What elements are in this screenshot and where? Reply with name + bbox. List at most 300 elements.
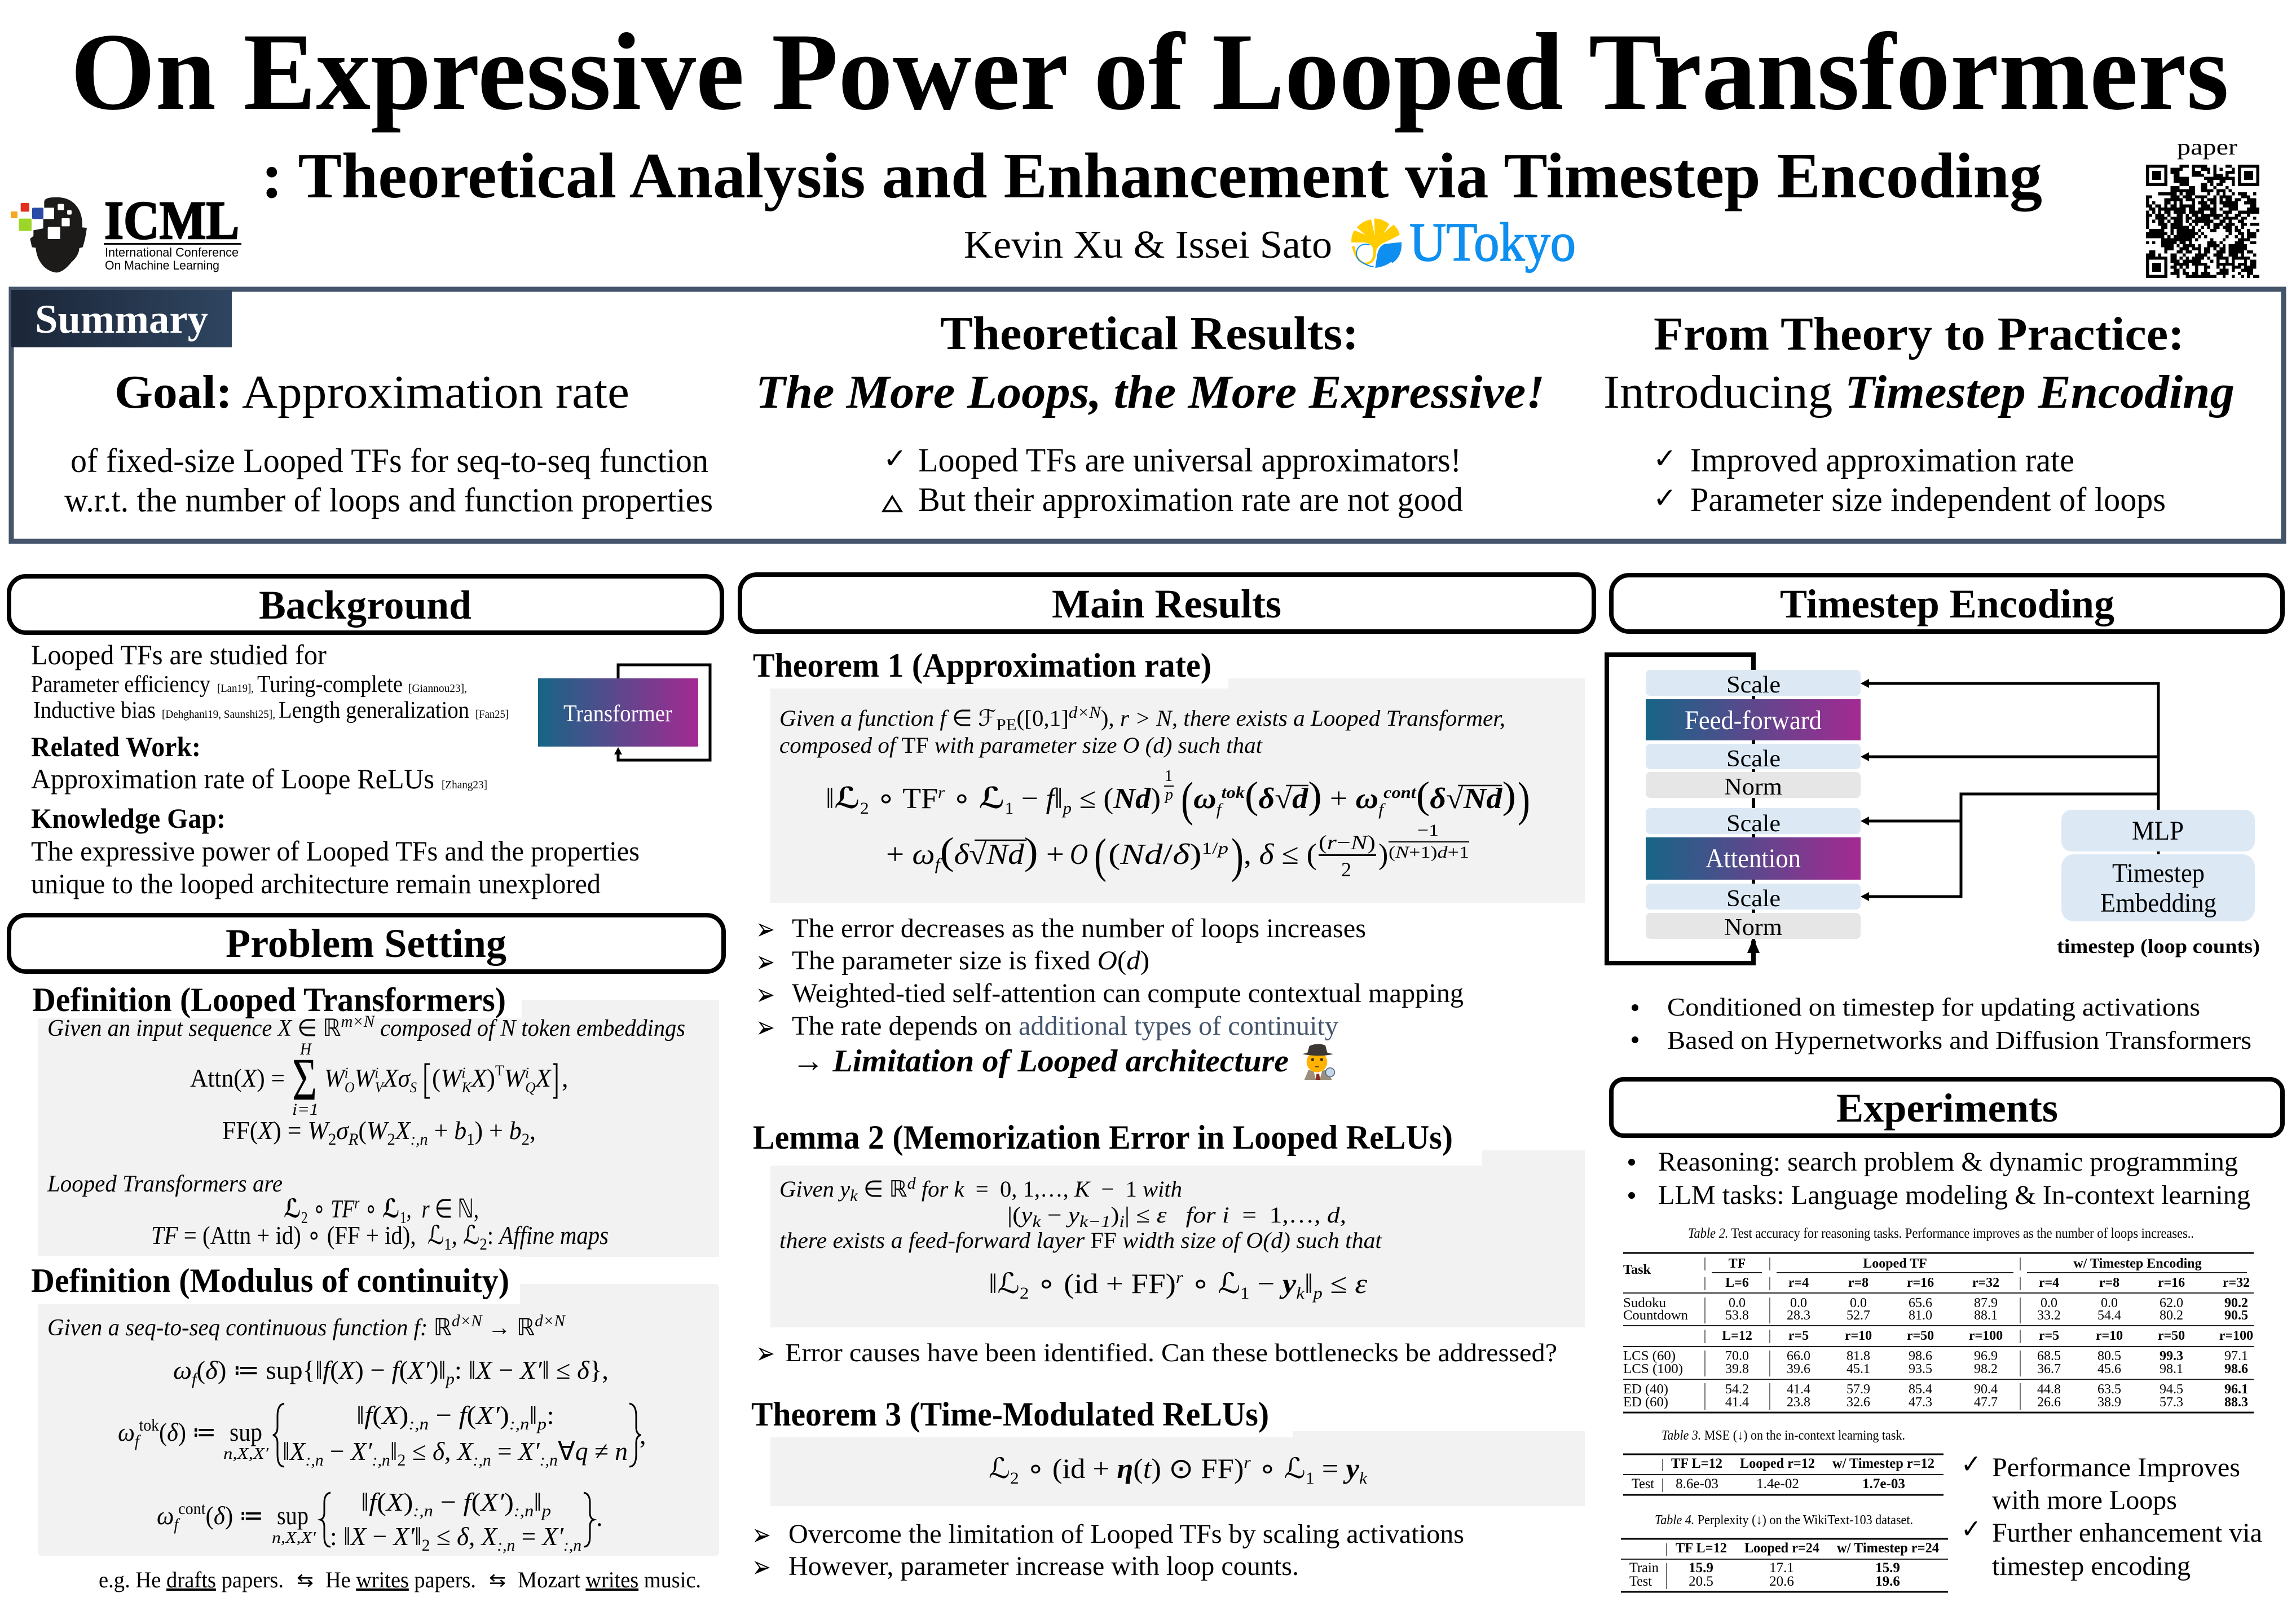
text: seq-to-seq function: d×N [535,1312,566,1330]
block: scale [1646,670,1861,698]
formula: token modulus: − [324,1437,351,1466]
summary: theoretical results [756,307,1545,518]
list: theorem 3 bullets: ➢ [752,1517,771,1552]
table 2: 98.6 [1909,1349,1932,1363]
heading: Experiments: Experiments [1836,1085,2058,1131]
text: lemma statement: k [850,1186,858,1205]
text block: background: Knowledge Gap: [31,802,226,834]
text: lemma statement: = 0, 1,…, K − 1 with [976,1176,1182,1202]
formula: lemma 2: y [1279,1268,1297,1299]
subtitle: : Theoretical Analysis and Enhancement via Timestep Encoding [261,140,2042,211]
text: lemma bullet: Error causes have been identified. Can these bottlenecks be addressed? [785,1338,1557,1367]
text block: background: [Giannou23], [408,682,467,695]
table 2: 53.8 [1725,1308,1749,1323]
formula: token modulus: ω [118,1418,135,1446]
table 2: 45.6 [2097,1362,2121,1376]
table 3: TF L=12 [1671,1456,1722,1471]
list: theorem 1 bullets: The error decreases as the number of loops increases [792,914,1366,943]
formula: modulus: ( [197,1356,205,1384]
formula: theorem 1 line 2: f [935,855,942,873]
table 2: TF [1729,1256,1746,1271]
table 4: w/ Timestep r=24 [1837,1541,1939,1556]
table 4: 20.5 [1689,1574,1713,1589]
formula: theorem 1 line 1: 1 [1165,767,1173,785]
callout: experiment takeaways: Further enhancement via [1992,1518,2262,1548]
formula: looped composition: r ∈ ℕ, [422,1194,492,1223]
formula: attention: Q [525,1079,536,1096]
summary: from theory to practice: ✓ [1653,482,1677,514]
table 2: ED (60) [1623,1395,1668,1410]
block: scale [1646,884,1861,912]
formula: theorem 1 line 1: δ√Nd) [1430,774,1515,817]
list: theorem 1 bullets: ➢ [756,977,775,1012]
formula: continuity modulus: cont [178,1499,206,1518]
table 2: r=16 [2158,1276,2185,1290]
table 3: Looped r=12 [1740,1456,1815,1471]
formula: theorem 1 line 1: p [1164,786,1173,804]
table 2: 98.1 [2160,1362,2183,1376]
table 3: 8.6e-03 [1676,1476,1718,1491]
table 2: 98.2 [1974,1362,1998,1376]
block: scale: Scale [1726,672,1781,698]
formula: theorem 1 line 1: − [1013,783,1046,815]
formula: feed-forward: , [530,1116,536,1145]
formula: modulus: ω [173,1356,192,1384]
formula: theorem 1 line 1: f‖ [1046,783,1063,815]
formula: attention: i [461,1065,465,1081]
formula: feed-forward: 2 [387,1130,395,1149]
formula: modulus: : ‖ [455,1356,476,1384]
formula: modulus: δ) ≔ sup{‖f(X) − f(X′)‖ [205,1356,446,1384]
list: theorem 1 bullets: Weighted-tied self-attention can compute contextual mapping [792,978,1464,1008]
text: lemma statement: ∈ ℝ [858,1176,907,1202]
table 2: 52.7 [1847,1308,1870,1323]
formula: attention: W [324,1063,346,1092]
text block: background: [Fan25] [475,708,509,721]
table 2: r=5 [1788,1329,1809,1343]
formula: feed-forward: X [394,1116,411,1145]
formula: theorem 1 line 1: ≤ ( [1072,783,1113,815]
formula: lemma 2: k [1296,1284,1305,1303]
table 3: 1.7e-03 [1862,1476,1905,1491]
summary: theoretical results: Looped TFs are universal approximators! [918,442,1461,479]
formula: theorem 1 line 1: ∘ [945,783,979,815]
formula: attention: i [525,1065,529,1081]
formula: theorem 1 line 2: ) [1231,828,1244,882]
table 2: w/ Timestep Encoding [2073,1256,2202,1271]
summary tab: Summary [35,297,208,342]
table 4: 15.9 [1689,1560,1713,1576]
text block: background: [Lan19], [217,682,254,695]
formula: continuity modulus: :,n [563,1536,581,1555]
formula: feed-forward: W [367,1116,389,1145]
heading: Timestep Encoding [1611,575,2282,632]
table 3 [1623,1454,1944,1495]
text: input sequence: Given an input sequence X ∈ ℝ [47,1016,352,1042]
formula: theorem 1 line 2: 2 [1341,858,1351,881]
table 2: r=50 [1907,1329,1934,1343]
formula: TF definition: , ℒ [452,1221,479,1250]
formula: feed-forward: FF(X) = W [222,1116,329,1145]
formula: continuity modulus: : ‖X − X′‖ [330,1522,422,1551]
table 2: 94.5 [2160,1382,2183,1397]
formula: continuity modulus: X′ [541,1522,564,1551]
heading: Problem Setting [9,915,724,972]
formula: theorem 1 line 2: ( [1094,828,1107,882]
list: timestep encoding bullets: Conditioned on timestep for updating activations [1667,992,2200,1021]
formula: token modulus: ‖ [390,1437,398,1466]
heading: Experiments [1611,1079,2282,1136]
formula: feed-forward: R [348,1130,358,1149]
list: timestep encoding bullets [1632,992,2251,1054]
formula: attention: Σ [292,1047,317,1113]
formula: token modulus: p [536,1415,547,1433]
formula: feed-forward: b [509,1116,522,1145]
authors: Kevin Xu & Issei Sato [964,223,1332,267]
formula: token modulus: ‖ [529,1401,537,1429]
formula: attention: i [374,1065,378,1081]
summary: from theory to practice [1603,308,2235,518]
formula: token modulus: − [429,1401,459,1429]
text: theorem statement: ), [1101,705,1114,731]
caption: table 4: Table 4. Perplexity (↓) on the WikiText-103 dataset. [1655,1513,1913,1528]
callout: experiment takeaways [1961,1449,2262,1581]
text: lemma statement: d [907,1174,916,1193]
list: experiments bullets [1628,1147,2250,1210]
text block: background: Length generalization [279,698,469,723]
text block: background: [Dehghani19, Saunshi25], [162,708,275,721]
formula: token modulus: :,n [540,1451,558,1469]
formula: theorem 1 line 2: , δ ≤ ( [1244,839,1317,871]
table 2: 0.0 [1790,1296,1807,1310]
formula: lemma 2: ‖ [1305,1268,1313,1299]
table 2: 54.4 [2097,1308,2121,1323]
panel: definition looped transformers [28,981,719,1257]
formula: attention: i=1 [292,1100,319,1119]
panel: theorem 1 [744,647,1585,903]
text block: background: The expressive power of Looped TFs and the properties [31,835,640,867]
formula: attention: K [461,1079,472,1096]
block: timestep embedding [2061,854,2255,921]
text: example sentences: He writes papers. [325,1567,476,1592]
list: experiments bullets: LLM tasks: Language modeling & In-context learning [1658,1180,2250,1210]
formula: TF definition: Affine maps [498,1221,609,1250]
text: lemma statement: Given y [779,1176,849,1202]
table 2: 33.2 [2037,1308,2061,1323]
text: lemma statement: for k [916,1176,970,1202]
formula: feed-forward: σ [336,1116,350,1145]
formula: theorem 1 line 2: p [1217,839,1228,858]
list: theorem 3 bullets [752,1517,1464,1585]
block: feed-forward: Feed-forward [1685,705,1822,735]
formula: continuity modulus: 2 [422,1536,430,1555]
formula: TF definition: 2 [479,1235,487,1254]
formula: continuity modulus: f(X′) [464,1488,513,1516]
formula: looped composition: ∘ [359,1194,382,1223]
formula: token modulus [118,1401,646,1469]
table 4 [1621,1539,1948,1592]
formula: token modulus: ‖f(X) [356,1401,408,1429]
list: theorem 3 bullets: Overcome the limitation of Looped TFs by scaling activations [788,1519,1464,1549]
formula: continuity modulus: δ, X [457,1522,498,1551]
icon: ICML logo: On Machine Learning [105,258,219,272]
table 2: 93.5 [1909,1362,1932,1376]
table 2: Task [1623,1263,1651,1277]
table 2: r=8 [2099,1276,2119,1290]
block: scale: Scale [1726,746,1781,772]
list: theorem 1 bullets: ➢ [756,944,775,979]
summary: from theory to practice: ✓ [1653,442,1677,475]
table 2: 41.4 [1725,1395,1749,1410]
list: theorem 3 bullets: However, parameter increase with loop counts. [788,1551,1299,1581]
formula: token modulus: sup [230,1418,262,1446]
text: example sentences: Mozart writes music. [518,1567,701,1592]
formula: lemma 2: ε [1355,1268,1367,1299]
formula: theorem 1 line 2: (Nd /δ) [1108,839,1200,871]
text block: background: Parameter efficiency [31,672,210,698]
diagram: looped transformer: Transformer [563,701,672,727]
summary: from theory to practice: Improved approximation rate [1690,442,2074,479]
table 4: 17.1 [1769,1560,1794,1576]
formula: theorem 1 line 1: ∘ TF [869,783,938,815]
callout: experiment takeaways: Performance Improves [1992,1453,2240,1482]
formula: looped composition: r [354,1194,360,1212]
formula: theorem 1 line 1: 2 [860,799,869,818]
table 2: 97.1 [2224,1349,2248,1363]
caption: table 3: Table 3. MSE (↓) on the in-context learning task. [1662,1428,1905,1443]
formula: token modulus: 2 [398,1451,406,1469]
text: example sentences: ⇆ [297,1569,314,1591]
summary: theoretical results: Theoretical Results: [940,307,1359,360]
formula: attention: V [375,1079,385,1096]
table 2: 0.0 [2041,1296,2057,1310]
formula: theorem 1 line 2: + ω [886,839,933,871]
formula: theorem 1 line 2: O [1070,839,1088,871]
summary tab [11,290,232,347]
panel: lemma 2: |(y [1007,1202,1031,1228]
formula: attention: , [562,1063,569,1092]
table 2: 0.0 [1729,1296,1746,1310]
text: looped transformers are: Looped Transformers are [47,1171,283,1197]
table 2: 26.6 [2037,1395,2061,1410]
formula: token modulus: ‖X [283,1437,306,1466]
heading: Theorem 1 (Approximation rate) [753,647,1211,684]
table 2: r=50 [2158,1329,2185,1343]
formula: TF definition: TF = (Attn + id) ∘ (FF + id), ℒ [151,1221,478,1250]
callout: experiment takeaways: ✓ [1961,1449,1981,1479]
formula: theorem 3: y [1343,1453,1360,1484]
table 2: r=4 [1788,1276,1809,1290]
formula: theorem 1 line 1: ( [1416,774,1430,817]
table 2: Sudoku [1623,1296,1666,1310]
formula: looped composition: 2 [301,1208,308,1227]
text: example sentences: ⇆ [489,1569,506,1591]
block: timestep embedding: Embedding [2100,888,2216,918]
list: experiments bullets: Reasoning: search problem & dynamic programming [1658,1147,2238,1177]
summary: theoretical results: ✓ [883,442,907,475]
formula: modulus: f [192,1370,199,1388]
table 4: Train [1629,1560,1659,1576]
table 2: 88.1 [1974,1308,1998,1323]
formula: theorem 1 line 1: f [1378,800,1386,819]
formula: modulus: X − X′‖ ≤ δ}, [476,1356,608,1384]
formula: lemma 2: ≤ [1323,1268,1355,1299]
formula: attention: (W [432,1063,462,1092]
panel: summary [11,289,2284,541]
formula: looped composition: , [407,1194,422,1223]
table 2: 66.0 [1787,1349,1810,1363]
table 2: r=8 [1848,1276,1868,1290]
formula: feed-forward: ) + [475,1116,509,1145]
text: seq-to-seq function: d×N [452,1312,483,1330]
formula: feed-forward: 1 [466,1130,475,1149]
table 2: 47.7 [1974,1395,1998,1410]
formula: attention [190,1040,569,1119]
formula: theorem 1 line 1: r [938,783,945,802]
formula: attention: X [535,1063,552,1092]
table 2: 36.7 [2037,1362,2061,1376]
text block: background: Related Work: [31,731,201,762]
callout: experiment takeaways: timestep encoding [1992,1551,2191,1581]
heading: Theorem 3 (Time-Modulated ReLUs) [751,1396,1269,1433]
table 4: Looped r=24 [1744,1541,1819,1556]
list: theorem 1 bullets: The rate depends on additional types of continuity [792,1011,1338,1041]
table 2: L=12 [1722,1329,1752,1343]
table 2: 41.4 [1787,1382,1810,1397]
table 4: 19.6 [1875,1574,1900,1589]
formula: token modulus: :,n [372,1451,390,1469]
icon: ICML logo [11,190,241,272]
formula: token modulus: : [547,1401,554,1429]
table 2: Looped TF [1863,1256,1927,1271]
table 2: 45.1 [1847,1362,1870,1376]
text: input sequence: composed of N token embeddings [374,1016,685,1042]
formula: theorem 3: ∘ ℒ [1251,1453,1306,1484]
text block: background [31,639,640,899]
table 2: 96.1 [2224,1382,2248,1397]
formula: theorem 1 line 2: (r−N) [1319,831,1376,854]
formula: feed-forward: + [428,1116,454,1145]
table 3: 1.4e-02 [1756,1476,1799,1491]
formula: continuity modulus: . [596,1503,602,1532]
list: theorem 1 bullets: ➢ [756,1009,775,1045]
formula: theorem 1 line 1: ) [1518,772,1530,826]
formula: theorem 1 line 1: Nd) [1113,783,1160,815]
formula: theorem 1 line 1: tok [1222,783,1245,802]
table 2: 80.5 [2097,1349,2121,1363]
summary: goal: Goal: Approximation rate [114,366,629,418]
summary: goal: of fixed-size Looped TFs for seq-to-seq function [70,442,708,479]
block: norm: Norm [1724,915,1782,941]
title: On Expressive Power of Looped Transformers [70,11,2229,133]
formula: token modulus: :,n [306,1451,324,1469]
table 2: Countdown [1623,1308,1688,1323]
formula: attention: W [504,1063,527,1092]
formula: token modulus: q ≠ n [575,1437,628,1466]
formula: theorem 3: ℒ [989,1453,1009,1484]
formula: theorem 1 line 1: 1 [1005,799,1013,818]
formula: token modulus: ( [159,1418,167,1446]
heading: Main Results [740,575,1594,632]
formula: token modulus: δ) ≔ [167,1418,219,1446]
heading: Definition (Modulus of continuity) [31,1262,509,1299]
formula: looped composition: 1 [400,1208,407,1227]
table 4: 15.9 [1875,1560,1900,1576]
formula: theorem 1 line 1: δ√d) + ω [1259,774,1377,817]
table 2: 88.3 [2224,1395,2248,1410]
table 2: r=10 [2096,1329,2123,1343]
block: scale [1646,808,1861,837]
icon: QR code [2146,166,2259,276]
table 2: 54.2 [1725,1382,1749,1397]
table 2: LCS (60) [1623,1349,1676,1363]
text: paper label: paper [2177,134,2237,160]
text: seq-to-seq function: Given a seq-to-seq continuous function f: ℝ [47,1315,464,1341]
formula: continuity modulus: :,n [413,1502,433,1520]
formula: feed-forward: 2 [328,1130,336,1149]
table 2 [1623,1253,2254,1413]
text: input sequence: m×N [341,1012,376,1031]
list: theorem 1 bullets: ➢ [756,911,775,947]
formula: token modulus: :,n [408,1415,429,1433]
heading: Background [9,576,722,633]
summary: theoretical results: The More Loops, the More Expressive! [756,366,1545,418]
table 2: 23.8 [1787,1395,1810,1410]
formula: attention: i [345,1065,349,1081]
table 2: r=10 [1845,1329,1872,1343]
table 2: 81.8 [1847,1349,1870,1363]
table 2: r=32 [2223,1276,2250,1290]
formula: theorem 1 line 2: δ√Nd) + [954,829,1062,872]
formula: attention: H [299,1040,312,1058]
table 2: 63.5 [2097,1382,2121,1397]
summary: from theory to practice: Introducing Timestep Encoding [1603,366,2235,418]
heading: Timestep Encoding: Timestep Encoding [1780,581,2114,626]
table 2: 81.0 [1909,1308,1932,1323]
table 2: r=100 [2219,1329,2253,1343]
formula: looped composition: ℒ [382,1194,400,1223]
table 2: 57.3 [2160,1395,2183,1410]
formula: lemma 2: 1 [1240,1284,1250,1303]
formula: lemma 2: p [1312,1284,1323,1303]
panel: lemma 2: k−1 [1079,1212,1110,1231]
formula: attention: T [495,1062,504,1079]
formula: continuity modulus: ω [157,1501,174,1530]
table 2: 87.9 [1974,1296,1998,1310]
table 2: r=32 [1972,1276,1999,1290]
table 2: 32.6 [1847,1395,1870,1410]
block: norm [1646,913,1861,941]
heading: Lemma 2 (Memorization Error in Looped ReLUs) [753,1119,1453,1156]
block: scale: Scale [1726,886,1781,912]
formula: theorem 1 line 2: (N+1) d+1 [1389,843,1469,862]
heading: Definition (Looped Transformers) [32,981,506,1018]
formula: continuity modulus: f [174,1515,180,1534]
block: scale [1646,744,1861,772]
text: theorem statement: r > N, there exists a Looped Transformer, [1120,705,1495,731]
formula: continuity modulus: ( [206,1501,214,1530]
table 2: 98.6 [2224,1362,2248,1376]
formula: lemma 2: 2 [1020,1284,1029,1303]
formula: feed-forward: 2 [522,1130,530,1149]
formula: attention: W [355,1063,377,1092]
table 2: ED (40) [1623,1382,1668,1397]
table 3: Test [1632,1476,1654,1491]
text: theorem statement: d×N [1069,703,1102,722]
formula: token modulus: :,n [509,1415,529,1433]
table 2: 70.0 [1725,1349,1749,1363]
formula: continuity modulus [157,1488,602,1555]
